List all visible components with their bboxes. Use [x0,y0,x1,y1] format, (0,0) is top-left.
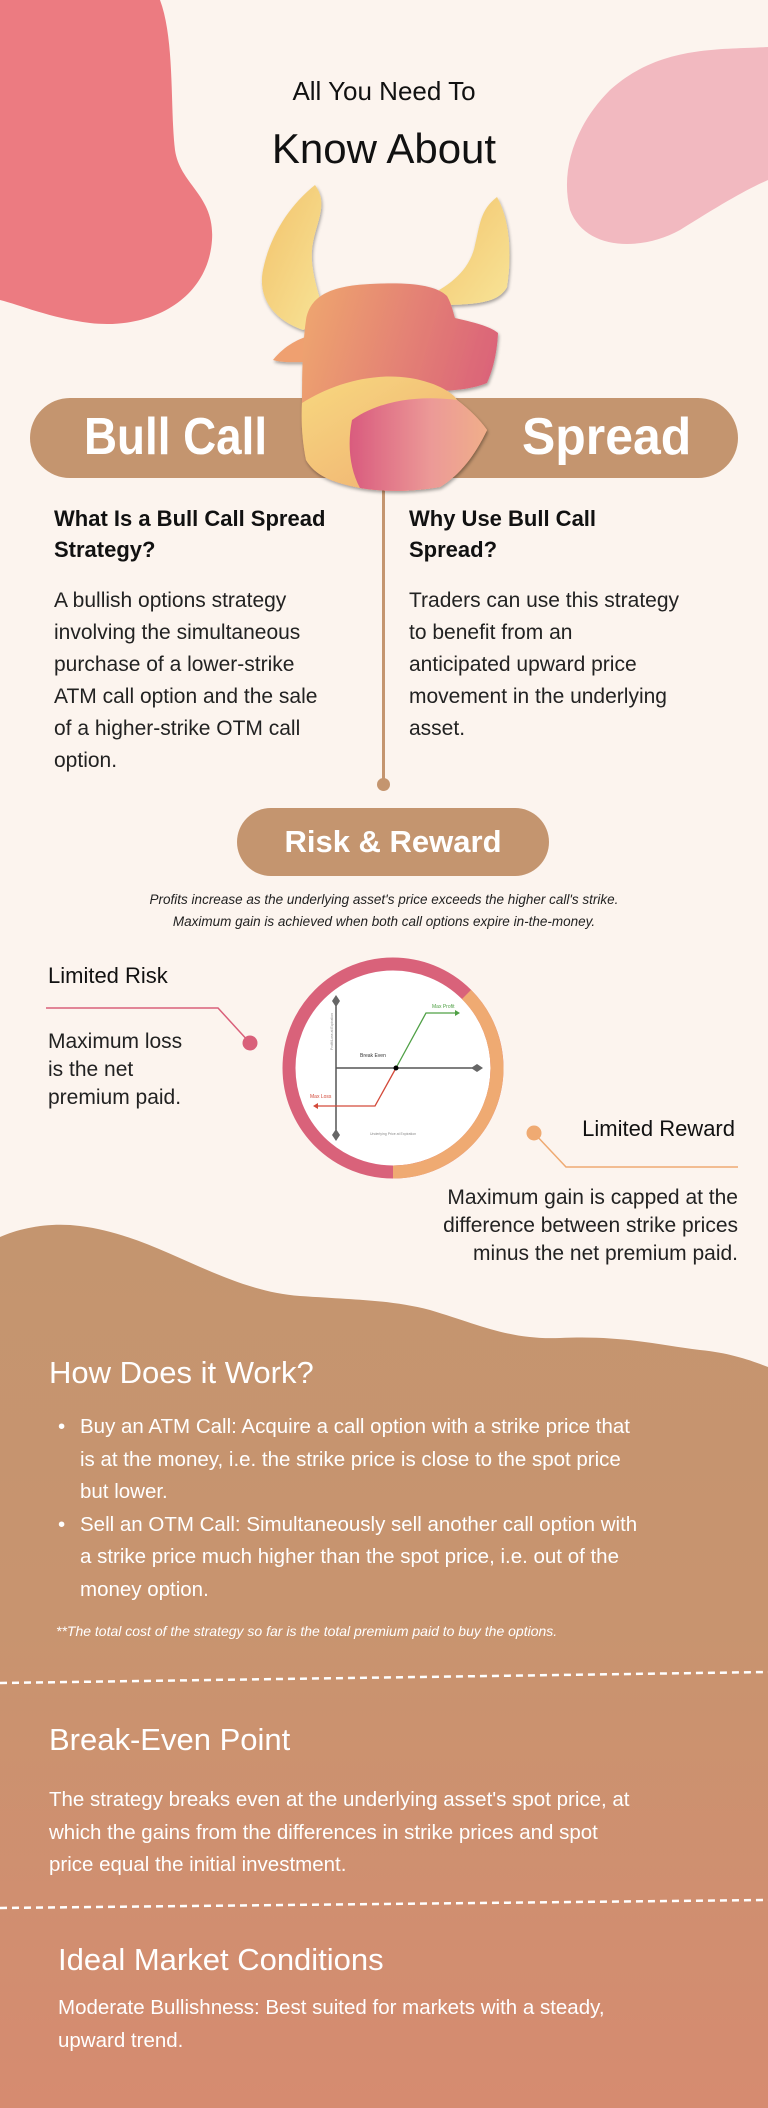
text: risk detail: Maximum loss [48,1030,182,1053]
text: reward detail: Maximum gain is capped at the [447,1186,738,1209]
list: how it works: but lower. [80,1480,168,1503]
title: All You Need To: All You Need To [292,76,476,106]
chart: payoff diagram: Break Even [360,1053,386,1059]
text: risk reward summary: Profits increase as the underlying asset's price exceeds the higher call's strike. [150,892,618,907]
chart: payoff diagram: Max Loss [310,1094,332,1100]
text: why use: anticipated upward price [409,653,637,676]
heading: Break-Even Point: Break-Even Point [49,1722,290,1757]
banner: Bull Call Spread: Spread [522,408,691,466]
text: footnote: **The total cost of the strategy so far is the total premium paid to buy the options. [56,1623,557,1639]
callout line: reward [526,1126,738,1168]
chart: payoff diagram: Max Profit [432,1004,455,1010]
heading: Ideal Market Conditions: Ideal Market Conditions [58,1942,384,1977]
text: why use: Traders can use this strategy [409,589,679,612]
list: how it works: a strike price much higher than the spot price, i.e. out of the [80,1545,619,1568]
heading: Why Use Bull Call Spread?: Why Use Bull Call [409,506,596,531]
heading: What Is a Bull Call Spread Strategy?: What Is a Bull Call Spread [54,506,325,531]
pill: Risk & Reward [237,808,549,876]
text: definition [54,589,317,772]
title: Know About: Know About [272,125,496,172]
text: break-even: price equal the initial investment. [49,1853,346,1876]
text: break-even: The strategy breaks even at the underlying asset's spot price, at [49,1788,630,1811]
text: why use: movement in the underlying [409,685,667,708]
connector dot [377,778,390,791]
label: Limited Reward: Limited Reward [582,1116,735,1141]
text: risk detail [48,1030,182,1109]
text: risk detail: premium paid. [48,1086,181,1109]
text: reward detail: difference between strike prices [443,1214,738,1237]
list: how it works: • [58,1513,65,1536]
heading: How Does it Work?: How Does it Work? [49,1355,314,1390]
heading: What Is a Bull Call Spread Strategy? [54,506,325,562]
text: definition: option. [54,749,117,772]
chart: payoff diagram: Underlying Price at Expiration [370,1132,416,1136]
text: definition: purchase of a lower-strike [54,653,294,676]
text: definition: ATM call option and the sale [54,685,317,708]
text: market conditions: Moderate Bullishness: Best suited for markets with a steady, [58,1996,605,2019]
pill: Risk & Reward: Risk & Reward [284,824,502,859]
text: why use: to benefit from an [409,621,572,644]
text: definition: A bullish options strategy [54,589,286,612]
icon: bull head [261,185,512,495]
text: definition: involving the simultaneous [54,621,300,644]
text: reward detail: minus the net premium paid. [473,1242,738,1265]
chart: payoff diagram [282,958,504,1178]
label: Limited Risk: Limited Risk [48,963,168,988]
heading: Why Use Bull Call Spread? [409,506,596,562]
text: market conditions [58,1996,605,2052]
text: market conditions: upward trend. [58,2028,183,2052]
text: risk reward summary [150,892,618,929]
callout line: risk [46,1007,258,1050]
chart: payoff diagram: Profit/Loss at Expiration [330,1013,334,1050]
list: how it works: money option. [80,1578,209,1600]
heading: Why Use Bull Call Spread?: Spread? [409,537,497,562]
text: risk detail: is the net [48,1058,133,1081]
list: how it works [58,1415,637,1600]
list: how it works: is at the money, i.e. the strike price is close to the spot price [80,1448,621,1470]
text: definition: of a higher-strike OTM call [54,717,300,740]
heading: What Is a Bull Call Spread Strategy?: Strategy? [54,537,155,562]
banner: Bull Call Spread: Bull Call [84,408,267,466]
connector line [382,478,385,784]
text: risk reward summary: Maximum gain is achieved when both call options expire in-the-money. [173,914,595,929]
list: how it works: • [58,1415,65,1438]
list: how it works: Sell an OTM Call: Simultaneously sell another call option with [80,1512,637,1536]
text: reward detail [443,1186,738,1265]
text: why use [409,589,679,740]
banner: Bull Call Spread [30,398,738,478]
text: why use: asset. [409,717,465,740]
text: break-even [49,1788,630,1876]
text: break-even: which the gains from the differences in strike prices and spot [49,1820,598,1844]
list: how it works: Buy an ATM Call: Acquire a call option with a strike price that [80,1415,630,1438]
